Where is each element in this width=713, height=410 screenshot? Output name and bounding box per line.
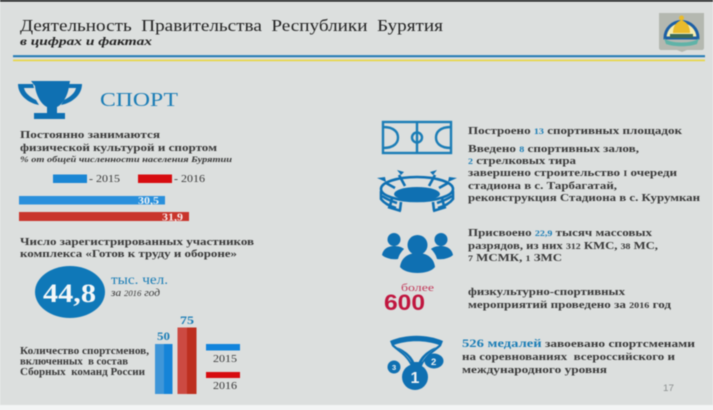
text: ranks	[468, 227, 658, 264]
text: facilities	[468, 125, 701, 204]
legend: bar years	[53, 173, 206, 185]
text: events: физкультурно-спортивных	[468, 286, 626, 298]
text: events	[468, 286, 672, 311]
text: unit: за 2016 год	[110, 288, 160, 299]
text: events: мероприятий проведено за 2016 год	[468, 299, 672, 311]
text: ranks: Присвоено 22,9 тысяч массовых	[468, 227, 653, 239]
callout: 44,8	[35, 266, 105, 318]
bar chart: team athletes	[155, 313, 196, 394]
legend: team years: 2015	[213, 353, 238, 365]
heading: sport: СПОРТ	[100, 89, 178, 111]
text: medals won: 526 медалей завоевано спортсменами	[462, 336, 696, 350]
text: GTO participants	[20, 236, 254, 260]
text: facilities: Введено 8 спортивных залов,	[468, 143, 639, 155]
text: physical culture: % от общей численности населения Бурятии	[20, 155, 233, 164]
text: ranks: 7 МСМК, 1 ЗМС	[468, 252, 562, 264]
text: national team athletes: включенных в состав	[20, 356, 128, 368]
legend: bar years: - 2015	[89, 173, 121, 185]
icon: stadium	[377, 170, 457, 211]
text: national team athletes: Сборных команд России	[20, 366, 146, 378]
bar chart: share of population: 30,5	[138, 195, 160, 207]
callout: more than 600	[384, 283, 434, 315]
bar chart: share of population: 31,9	[162, 211, 184, 223]
text: medals won	[462, 336, 696, 376]
icon: medals: 2	[431, 357, 436, 368]
icon: emblem of Buryatia	[659, 13, 704, 52]
text: ranks: разрядов, из них 312 КМС, 38 МС,	[468, 240, 658, 252]
callout: more than 600: более	[401, 283, 434, 294]
text: facilities: реконструкция Стадиона в с. Курумкан	[468, 192, 701, 204]
legend: team years: 2016	[213, 380, 238, 392]
text: national team athletes	[20, 345, 149, 378]
callout: 44,8: 44,8	[43, 279, 96, 308]
text: medals won: международного уровня	[462, 364, 607, 376]
icon: people	[382, 233, 453, 273]
text: facilities: стадиона в с. Тарбагатай,	[468, 180, 617, 192]
legend: team years	[206, 344, 240, 392]
text: GTO participants: комплекса «Готов к труду и обороне»	[20, 248, 237, 260]
icon: medals	[388, 336, 444, 390]
page number: 17	[663, 383, 674, 394]
text: medals won: на соревнованиях всероссийского и	[462, 351, 676, 363]
text: physical culture	[20, 129, 233, 164]
text: unit	[110, 272, 168, 299]
subtitle: в цифрах и фактах	[20, 36, 152, 48]
icon: sports field	[383, 122, 451, 153]
text: facilities: Построено 13 спортивных площадок	[468, 125, 683, 137]
text: facilities: завершено строительство I очереди	[468, 167, 678, 179]
text: national team athletes: Количество спортсменов,	[20, 345, 149, 357]
legend: bar years: - 2016	[174, 173, 206, 185]
text: physical culture: Постоянно занимаются	[20, 129, 160, 141]
text: unit: тыс. чел.	[111, 272, 168, 287]
bar chart: team athletes: 75	[180, 313, 194, 327]
text: GTO participants: Число зарегистрированных участников	[20, 236, 254, 248]
text: physical culture: физической культурой и спортом	[20, 142, 218, 154]
callout: more than 600: 600	[384, 290, 425, 315]
icon: trophy	[18, 81, 82, 119]
text: facilities: 2 стрелковых тира	[468, 155, 577, 167]
icon: medals: 3	[392, 363, 396, 372]
bar chart: team athletes: 50	[157, 329, 170, 343]
title: Деятельность Правительства Республики Бурятия	[20, 16, 443, 35]
bar chart: share of population	[19, 195, 189, 223]
icon: medals: 1	[410, 370, 420, 387]
